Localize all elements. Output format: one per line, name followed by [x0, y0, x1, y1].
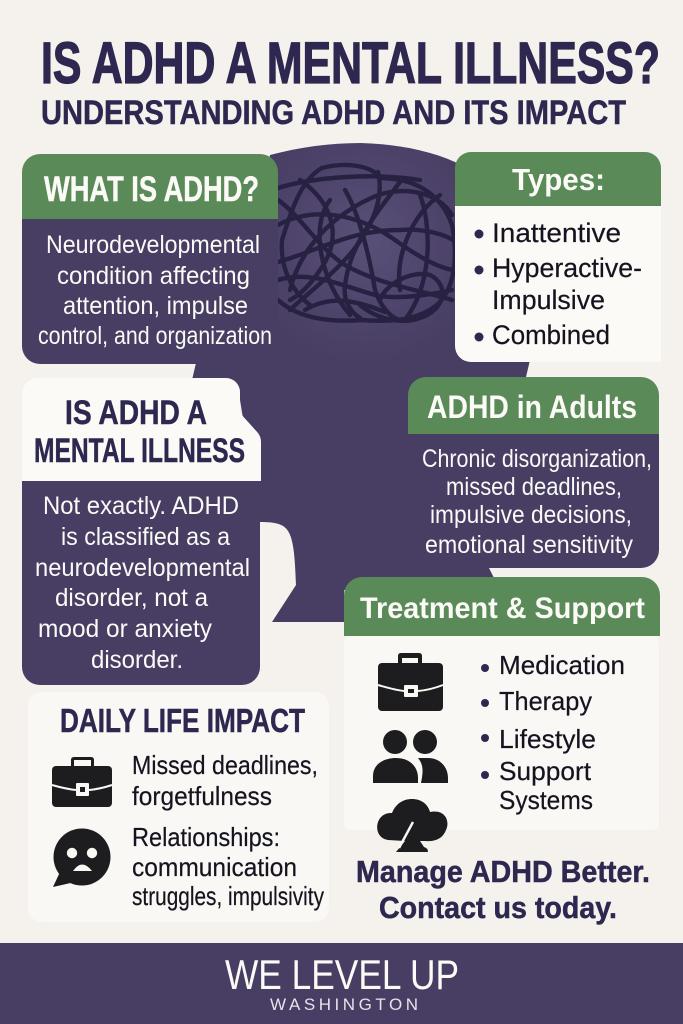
- treatment list: Therapy: [499, 686, 592, 716]
- footer bar: WE LEVEL UP: [225, 951, 459, 998]
- footer bar: [0, 943, 683, 1024]
- treatment list: [481, 650, 625, 815]
- panel: ADHD in adults: emotional sensitivity: [425, 531, 633, 559]
- panel: what is ADHD: attention, impulse: [63, 292, 248, 320]
- treatment list: Support: [499, 756, 592, 786]
- panel: types: [455, 152, 661, 362]
- panel: what is ADHD: Neurodevelopmental: [46, 231, 260, 259]
- daily life text: Relationships:: [132, 822, 280, 852]
- treatment list: Systems: [499, 785, 593, 815]
- panel: is ADHD a mental illness: disorder, not a: [55, 584, 208, 612]
- panel: ADHD in adults: missed deadlines,: [446, 473, 622, 501]
- panel: is ADHD a mental illness: disorder.: [91, 646, 183, 674]
- treatment list: Lifestyle: [499, 724, 596, 754]
- panel: is ADHD a mental illness: Not exactly. ADHD: [43, 492, 239, 520]
- panel: is ADHD a mental illness: mood or anxiety: [38, 615, 212, 643]
- call to action: Manage ADHD Better.: [356, 854, 650, 889]
- treatment list: Medication: [499, 650, 625, 680]
- daily life text: Missed deadlines,: [132, 750, 318, 780]
- head silhouette: [192, 143, 530, 622]
- panel: types: Impulsive: [492, 285, 605, 315]
- panel: types: Hyperactive-: [492, 253, 642, 283]
- panel: what is ADHD: condition affecting: [57, 262, 250, 290]
- icon: sad speech bubble: [53, 828, 110, 887]
- call to action: Contact us today.: [379, 890, 617, 925]
- daily life text: struggles, impulsivity: [132, 881, 324, 911]
- panel: is ADHD a mental illness: MENTAL ILLNESS: [34, 432, 245, 470]
- panel: what is ADHD: [22, 154, 278, 364]
- panel: is ADHD a mental illness: neurodevelopmental: [35, 554, 250, 582]
- call to action: [356, 854, 650, 925]
- daily life text: communication: [132, 852, 297, 882]
- footer bar: WASHINGTON: [270, 995, 418, 1014]
- panel: is ADHD a mental illness: IS ADHD A: [65, 394, 207, 432]
- icon: cloud tree: [377, 799, 447, 852]
- panel: treatment and support: Treatment & Support: [360, 592, 645, 625]
- panel: types: Inattentive: [492, 218, 621, 248]
- panel: what is ADHD: control, and organization: [38, 322, 272, 350]
- panel: ADHD in adults: impulsive decisions,: [430, 501, 632, 529]
- icon: people: [373, 730, 448, 783]
- panel: what is ADHD: WHAT IS ADHD?: [44, 170, 259, 209]
- panel: is ADHD a mental illness: is classified as a: [61, 523, 230, 551]
- panel: daily life impact: DAILY LIFE IMPACT: [60, 702, 305, 739]
- icon: tangled scribble brain: [278, 165, 455, 321]
- panel: types: Combined: [492, 320, 610, 350]
- panel: ADHD in adults: Chronic disorganization,: [422, 445, 652, 473]
- daily life text: forgetfulness: [132, 781, 272, 811]
- panel: is ADHD a mental illness: [22, 378, 261, 685]
- panel: daily life impact: [28, 692, 329, 922]
- panel: types: Types:: [512, 162, 605, 197]
- daily life text: [132, 750, 324, 911]
- icon: briefcase: [378, 653, 443, 711]
- panel: treatment and support: [344, 577, 660, 852]
- icon: briefcase small: [52, 757, 112, 807]
- panel: ADHD in adults: [408, 377, 659, 568]
- panel: ADHD in adults: ADHD in Adults: [427, 389, 637, 425]
- title: [41, 31, 660, 132]
